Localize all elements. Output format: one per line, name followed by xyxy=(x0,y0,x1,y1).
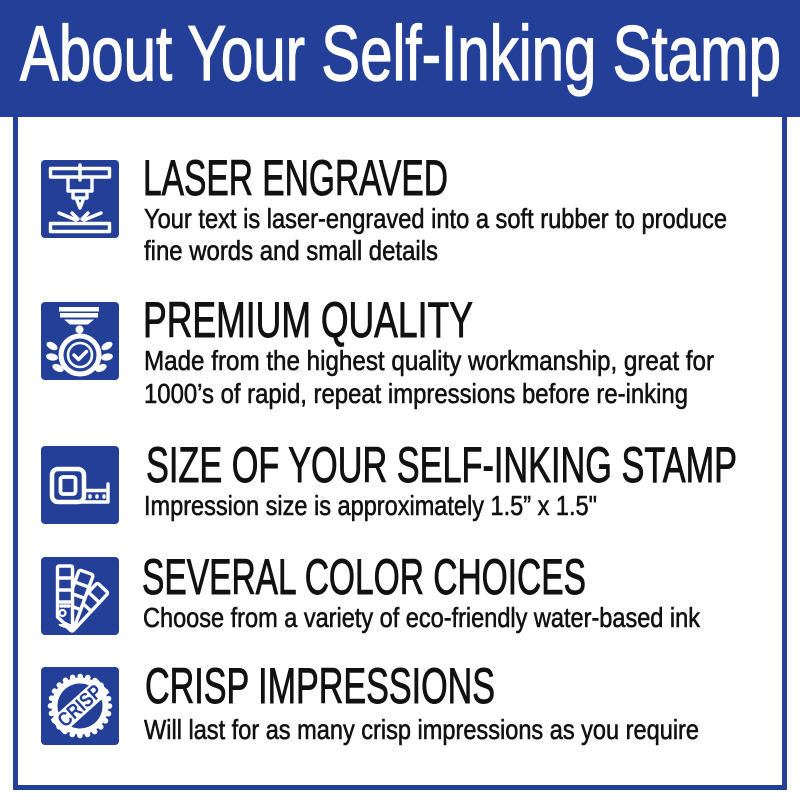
header banner xyxy=(0,0,800,117)
heading: LASER ENGRAVED xyxy=(143,150,448,206)
description xyxy=(144,345,714,409)
icon: colour swatch fan xyxy=(41,557,119,635)
heading: CRISP IMPRESSIONS xyxy=(145,658,495,714)
panel: premium quality xyxy=(41,292,714,409)
heading: PREMIUM QUALITY xyxy=(143,292,473,348)
description: fine words and small details xyxy=(144,235,438,266)
description: Will last for as many crisp impressions as you require xyxy=(144,714,699,745)
icon: laser engraver xyxy=(41,160,119,238)
description: Choose from a variety of eco-friendly water-based ink xyxy=(143,602,701,633)
panel: crisp impressions xyxy=(41,658,699,745)
icon: tape measure xyxy=(41,446,119,524)
heading: SEVERAL COLOR CHOICES xyxy=(142,549,586,605)
description: 1000’s of rapid, repeat impressions before re-inking xyxy=(144,378,688,409)
description: Made from the highest quality workmanship, great for xyxy=(144,345,714,376)
icon: medal xyxy=(41,302,119,380)
panel: color choices xyxy=(41,549,701,635)
panel: laser engraved xyxy=(41,150,727,266)
icon: crisp seal xyxy=(41,667,119,745)
panel: size xyxy=(41,437,737,524)
description: Impression size is approximately 1.5” x 1.5" xyxy=(144,490,597,521)
icon: crisp seal: CRISP xyxy=(54,681,107,732)
description xyxy=(144,203,727,266)
